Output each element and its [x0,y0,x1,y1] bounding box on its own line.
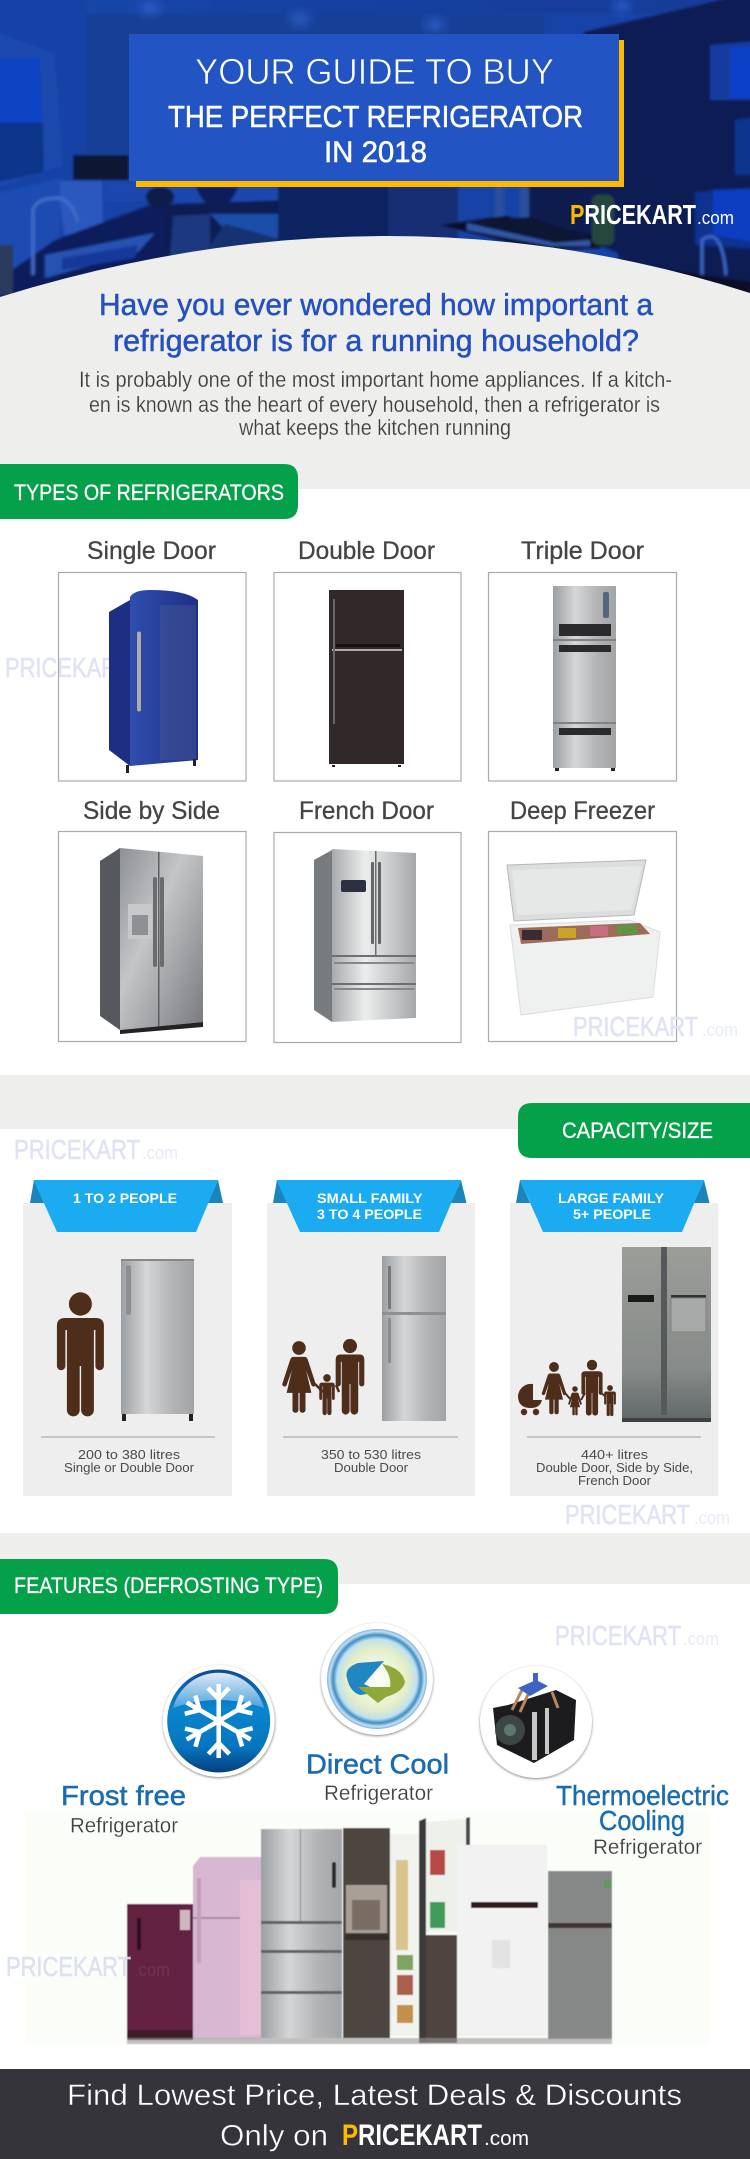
person [57,1292,104,1416]
watermark: .com [134,1960,170,1980]
panel: large family [510,1180,718,1496]
maroon fridge [127,1904,193,2040]
section heading: types of refrigerators: TYPES OF REFRIGERATORS [14,480,284,505]
fridge: single door [109,590,198,773]
label: frost free: Frost free [61,1780,186,1811]
dark wood fridge [343,1828,390,2038]
capacity text [536,1447,693,1488]
panel: side by side [58,797,246,1042]
header logo: PRICEKART [570,199,696,230]
label: direct cool: Refrigerator [324,1781,433,1805]
ribbon: LARGE FAMILY [558,1190,665,1206]
open interior [390,1834,419,2036]
intro heading: Have you ever wondered how important a [99,287,654,322]
watermark: PRICEKART [573,1011,698,1042]
ribbon: SMALL FAMILY [317,1190,423,1206]
french door fridge [261,1829,342,2038]
fridge: double door [329,590,404,767]
fridge: french door [314,849,416,1022]
section heading: features: FEATURES (DEFROSTING TYPE) [14,1573,323,1598]
label: direct cool: Direct Cool [306,1748,449,1780]
panel: double door [274,537,461,781]
icon: thermoelectric unit [480,1666,592,1779]
label: thermoelectric cooling: Cooling [599,1805,685,1836]
grey band [0,1533,750,1584]
panel: french door: French Door [299,797,434,825]
title line two: THE PERFECT REFRIGERATOR [168,99,583,134]
panel: double door: Double Door [298,537,435,565]
grey fridge [548,1871,612,2039]
ribbon [30,1180,223,1232]
family [282,1339,364,1415]
title line three: IN 2018 [324,136,427,169]
panel: 1 to 2 people [23,1180,232,1496]
section heading: types of refrigerators [0,464,298,519]
watermark: PRICEKART [6,1951,131,1982]
family [518,1360,616,1416]
footer line two: Only on [220,2120,328,2152]
header logo: .com [697,208,734,228]
intro paragraph: what keeps the kitchen running [238,415,511,440]
fridge: triple door [553,586,616,771]
image: refrigerator line-up [25,1811,710,2044]
panel: triple door [488,537,676,781]
label: frost free [61,1780,186,1838]
panel: french door [274,797,461,1042]
fridge [622,1247,711,1422]
freezer illustration [507,860,660,1015]
panel: single door [58,537,246,781]
fridge [121,1259,194,1421]
capacity text: Single or Double Door [64,1460,195,1475]
footer [0,2069,750,2159]
panel: single door: Single Door [87,537,216,565]
capacity text: French Door [578,1473,652,1488]
ribbon: 3 TO 4 PEOPLE [317,1206,422,1222]
label: frost free: Refrigerator [70,1814,178,1838]
footer line one: Find Lowest Price, Latest Deals & Discounts [67,2079,682,2112]
icon: direct cool arrows [321,1623,433,1736]
header kitchen photo [0,0,750,310]
ribbon: 5+ PEOPLE [573,1206,651,1222]
intro paragraph: It is probably one of the most important home appliances. If a kitch- [79,367,672,392]
pink fridge [193,1857,261,2039]
watermark: .com [702,1020,738,1040]
label: thermoelectric cooling [556,1780,729,1859]
intro paragraph: en is known as the heart of every household, then a refrigerator is [89,392,660,417]
footer logo: PRICEKART [342,2119,482,2152]
watermark: .com [142,1143,178,1163]
panel: deep freezer: Deep Freezer [510,797,655,825]
capacity text [64,1447,195,1475]
panel: triple door: Triple Door [521,537,644,565]
watermark: PRICEKART [555,1620,681,1651]
watermark: .com [683,1629,719,1649]
panel: side by side: Side by Side [83,797,220,825]
ribbon [273,1180,466,1232]
fridge: side by side [100,848,203,1034]
title box [129,34,624,187]
grey intro background with curved top [0,236,750,489]
intro paragraph [79,367,672,440]
label: thermoelectric cooling: Thermoelectric [556,1780,729,1811]
panel: deep freezer [488,797,676,1042]
open door [419,1817,470,2043]
watermark: .com [694,1508,730,1528]
watermark: PRICEKART [565,1499,690,1530]
ribbon [516,1180,710,1232]
capacity text: Double Door, Side by Side, [536,1460,693,1475]
white fridge [457,1845,547,2036]
watermark: .com [131,661,167,681]
footer logo: .com [484,2128,529,2150]
section heading: capacity: CAPACITY/SIZE [562,1118,713,1143]
capacity text: Double Door [334,1460,409,1475]
intro heading: refrigerator is for a running household? [113,323,639,358]
section heading: features [0,1559,338,1614]
watermark: PRICEKART [5,652,130,683]
section heading: capacity [518,1103,750,1158]
capacity text [321,1447,422,1475]
fridge [382,1256,446,1421]
label: thermoelectric cooling: Refrigerator [593,1835,702,1859]
grey band [0,1075,750,1129]
icon: snowflake [163,1665,275,1778]
intro heading [99,287,654,358]
label: direct cool [306,1748,449,1805]
watermark: PRICEKART [14,1134,140,1165]
panel: small family [267,1180,475,1496]
ribbon: 1 TO 2 PEOPLE [73,1190,177,1206]
capacity text: 350 to 530 litres [321,1447,422,1462]
capacity text: 440+ litres [581,1447,649,1462]
capacity text: 200 to 380 litres [78,1447,181,1462]
title line one: YOUR GUIDE TO BUY [195,51,554,92]
